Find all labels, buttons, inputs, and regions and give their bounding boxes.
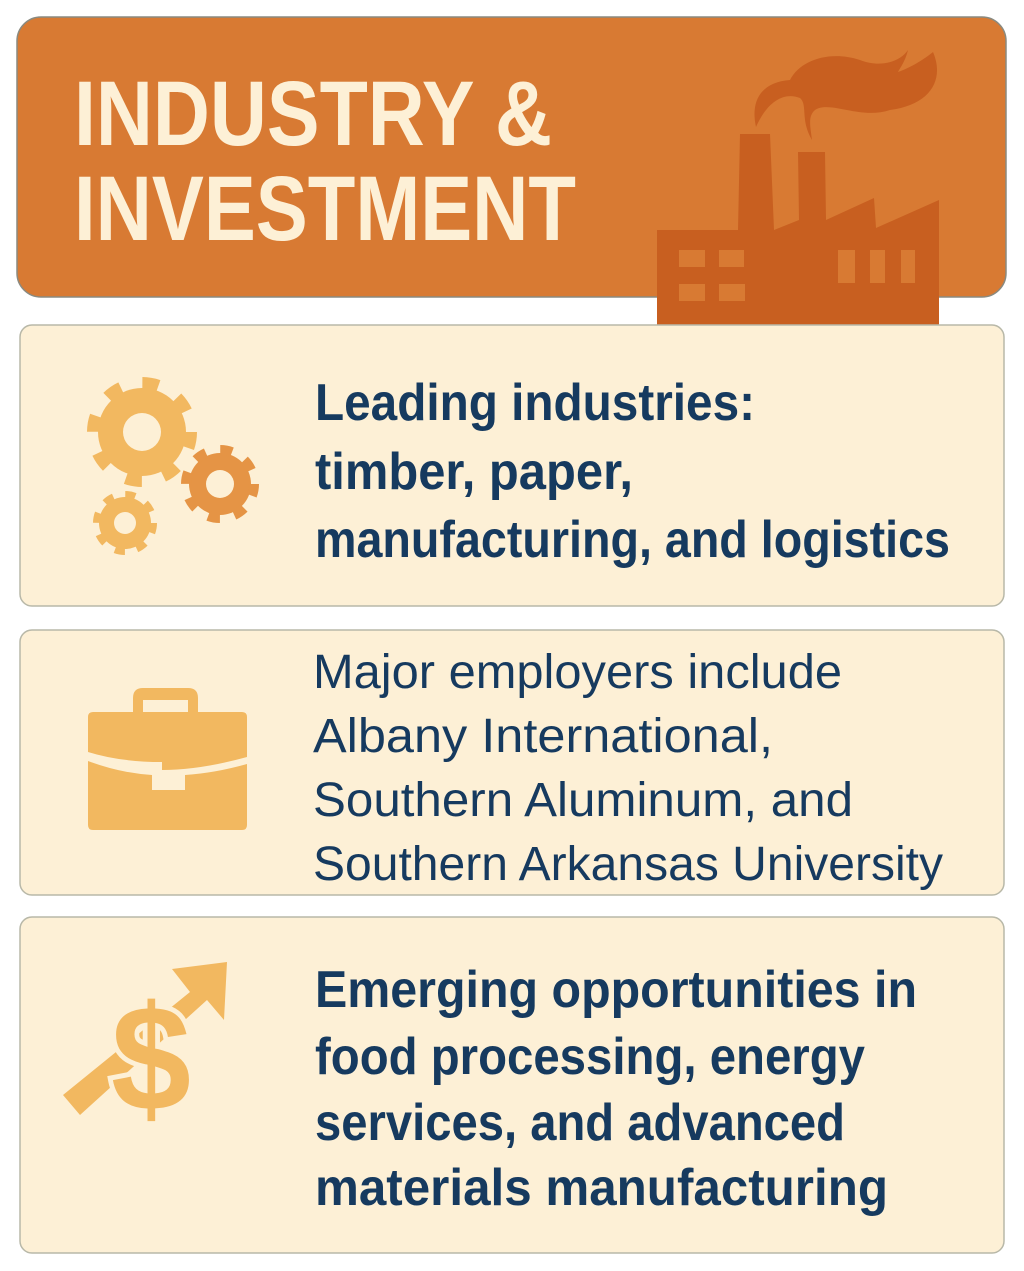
- text: leading industries: timber, paper,: [315, 443, 633, 501]
- text: major employers: Albany International,: [313, 710, 773, 763]
- title: [74, 63, 576, 260]
- text: major employers: Southern Arkansas University: [313, 838, 943, 891]
- icon: dollar arrow: $: [111, 974, 191, 1142]
- header banner: [17, 17, 1006, 297]
- text: leading industries: Leading industries:: [315, 374, 755, 432]
- text: leading industries: manufacturing, and logistics: [315, 511, 950, 569]
- text: major employers: Southern Aluminum, and: [313, 774, 853, 827]
- text: emerging opportunities: food processing, energy: [315, 1028, 865, 1086]
- text: emerging opportunities: services, and advanced: [315, 1094, 845, 1152]
- icon: briefcase: [88, 688, 247, 830]
- title: INDUSTRY &: [74, 63, 552, 165]
- title: INVESTMENT: [74, 158, 576, 260]
- panel: emerging opportunities: [20, 917, 1004, 1253]
- text: emerging opportunities: materials manufacturing: [315, 1159, 888, 1217]
- icon: gears: [94, 384, 254, 551]
- text: leading industries: [315, 374, 950, 569]
- icon: dollar arrow: [63, 962, 227, 1142]
- icon: factory: [657, 50, 939, 325]
- text: emerging opportunities: Emerging opportunities in: [315, 961, 917, 1019]
- panel: major employers: [20, 630, 1004, 895]
- text: major employers: [313, 646, 943, 891]
- text: major employers: Major employers include: [313, 646, 842, 699]
- text: emerging opportunities: [315, 961, 917, 1217]
- panel: leading industries: [20, 325, 1004, 606]
